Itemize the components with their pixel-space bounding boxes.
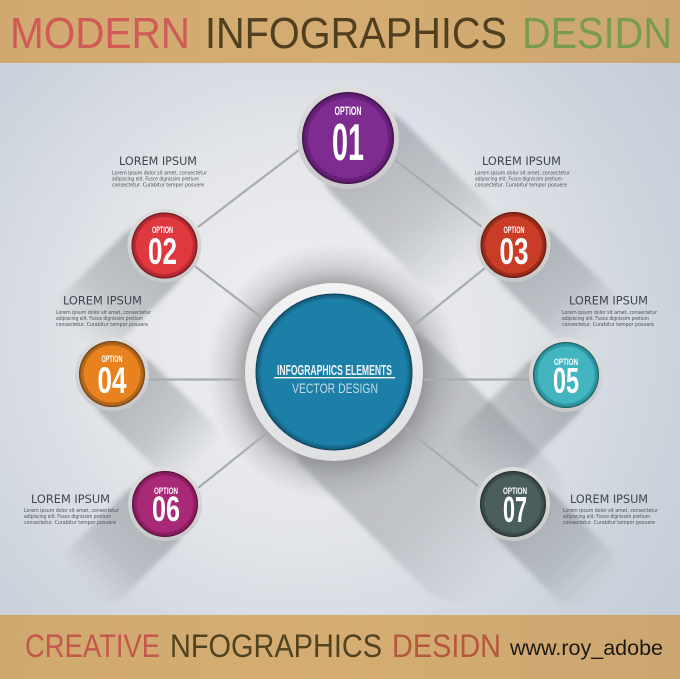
label 05: LOREM IPSUM: [569, 294, 648, 308]
footer text: NFOGRAPHICS: [170, 628, 382, 664]
label 04: Lorem ipsum dolor sit amet, consectetur: [56, 310, 152, 316]
label 03: adipiscing elit. Fusce dignissim pretium: [475, 176, 562, 182]
label 02: consectetur. Curabitur tempor posuere: [112, 182, 204, 188]
option 07: OPTION: [503, 486, 527, 497]
top banner: [0, 0, 680, 63]
option 04: OPTION: [102, 354, 122, 364]
label 05: adipiscing elit. Fusce dignissim pretium: [562, 316, 649, 322]
label 06: adipiscing elit. Fusce dignissim pretium: [24, 514, 111, 520]
center subheading: VECTOR DESIGN: [292, 380, 378, 396]
footer text: [25, 628, 501, 664]
website: www.roy_adobe: [509, 637, 663, 660]
option 05: OPTION: [554, 357, 578, 368]
option 02: OPTION: [152, 225, 173, 235]
label 07: adipiscing elit. Fusce dignissim pretium: [563, 514, 650, 520]
connector lines: [146, 150, 530, 488]
central halo: [206, 244, 462, 500]
label 07: consectetur. Curabitur tempor posuere: [563, 520, 655, 526]
label 03: Lorem ipsum dolor sit amet, consectetur: [475, 170, 571, 176]
label 07: LOREM IPSUM: [570, 492, 648, 506]
footer text: CREATIVE: [25, 628, 160, 664]
option 01: 01: [332, 114, 364, 172]
label 06: Lorem ipsum dolor sit amet, consectetur: [24, 508, 120, 514]
long shadows: [50, 102, 624, 622]
option 02: [128, 208, 202, 282]
center circle: [245, 283, 423, 461]
option 03: OPTION: [504, 225, 524, 235]
center heading: INFOGRAPHICS ELEMENTS: [277, 362, 392, 379]
option 01: [297, 87, 399, 189]
label 06: consectetur. Curabitur tempor posuere: [24, 520, 116, 526]
label 04: consectetur. Curabitur tempor posuere: [56, 322, 148, 328]
option 02: 02: [148, 231, 177, 272]
label 03: LOREM IPSUM: [482, 154, 561, 168]
title: [10, 9, 672, 58]
label 04: LOREM IPSUM: [63, 294, 142, 308]
label 05: consectetur. Curabitur tempor posuere: [562, 322, 654, 328]
option 06: [128, 467, 202, 541]
option 07: [476, 467, 550, 541]
label 04: adipiscing elit. Fusce dignissim pretium: [56, 316, 143, 322]
label 02: [112, 154, 208, 188]
option 07: 07: [503, 489, 527, 530]
label 05: [562, 294, 658, 328]
label 02: LOREM IPSUM: [119, 154, 197, 168]
label 07: Lorem ipsum dolor sit amet, consectetur: [563, 508, 659, 514]
title: MODERN: [10, 9, 190, 58]
option 05: 05: [553, 360, 579, 401]
label 02: adipiscing elit. Fusce dignissim pretium: [112, 176, 199, 182]
label 04: [56, 294, 152, 328]
label 03: consectetur. Curabitur tempor posuere: [475, 182, 567, 188]
option 04: 04: [98, 360, 127, 401]
footer text: DESIDN: [392, 628, 501, 664]
option 03: [476, 208, 550, 282]
option 04: [75, 337, 149, 411]
label 03: [475, 154, 571, 188]
option 05: [529, 338, 603, 412]
label 06: [24, 492, 120, 526]
option 01: OPTION: [334, 106, 362, 118]
option 06: OPTION: [154, 486, 178, 497]
label 06: LOREM IPSUM: [31, 492, 110, 506]
option 06: 06: [152, 490, 180, 529]
label 05: Lorem ipsum dolor sit amet, consectetur: [562, 310, 658, 316]
bottom banner: [0, 615, 680, 679]
title: INFOGRAPHICS: [205, 9, 507, 58]
option 03: 03: [500, 231, 528, 272]
label 02: Lorem ipsum dolor sit amet, consectetur: [112, 170, 208, 176]
label 07: [563, 492, 659, 526]
